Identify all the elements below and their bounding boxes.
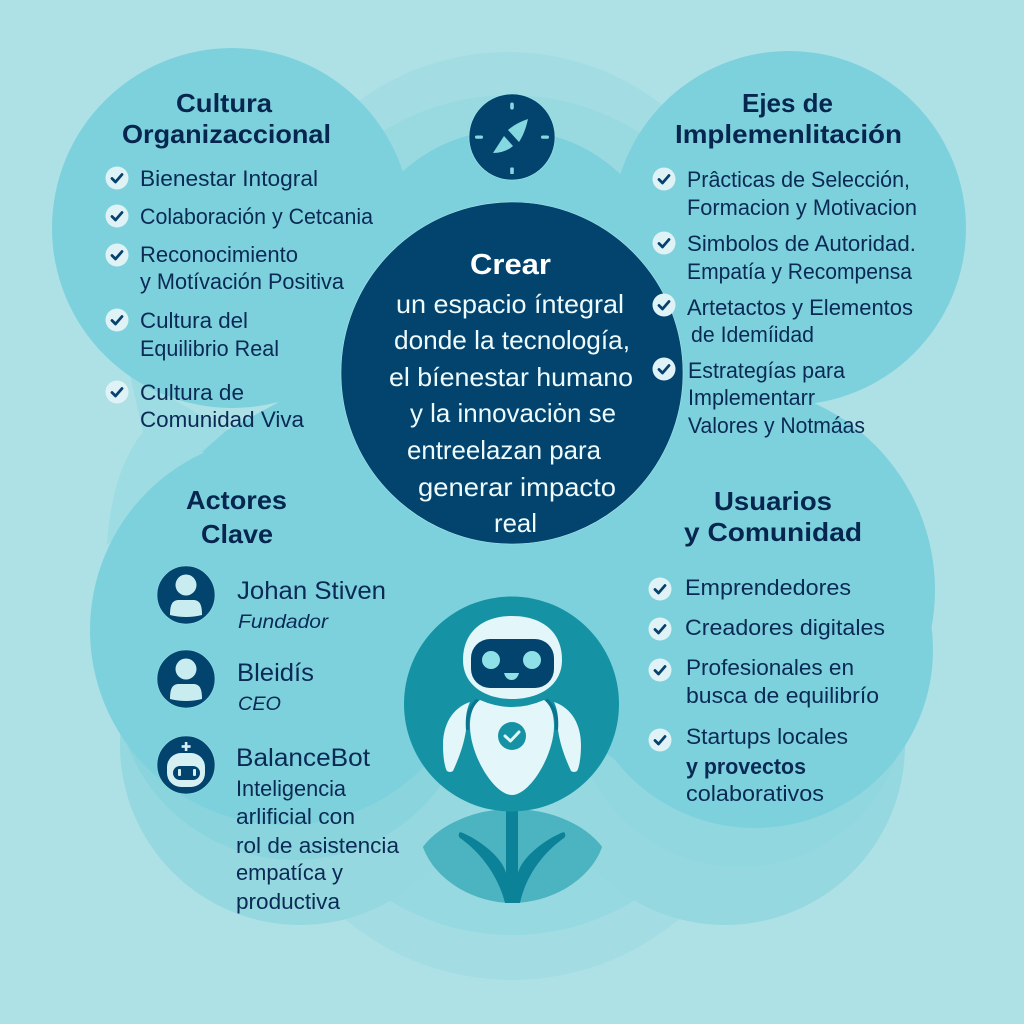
text block: central statement: generar impacto xyxy=(418,472,616,502)
panel backgrounds: four lobes xyxy=(52,48,966,828)
icon: user xyxy=(157,650,215,708)
robot head xyxy=(463,616,562,699)
heading: Ejes de Implemenlitación xyxy=(675,88,902,149)
list: usuarios items: y provectos xyxy=(686,754,806,779)
text block: central statement: donde la tecnología, xyxy=(394,325,630,355)
robot straps xyxy=(467,700,557,730)
list: cultura items: Cultura de xyxy=(140,380,244,405)
list: ejes items: Estrategías para xyxy=(688,358,846,383)
list: cultura items: Reconocimiento xyxy=(140,242,298,267)
panel: Actores Clave xyxy=(157,485,400,914)
text block: central statement: entreelazan para xyxy=(407,435,602,465)
heading: Ejes de Implemenlitación: Ejes de xyxy=(742,88,833,118)
list: cultura items: Comunidad Viva xyxy=(140,407,305,432)
list: usuarios items xyxy=(648,575,885,806)
robot chest check xyxy=(498,722,526,750)
actor: Bleidís xyxy=(157,650,314,715)
list: usuarios items: Emprendedores xyxy=(685,575,851,600)
text block: central statement: un espacio íntegral xyxy=(396,289,624,319)
heading: Usuarios y Comunidad: Usuarios xyxy=(714,486,832,516)
icon: compass xyxy=(469,94,555,180)
list: ejes items: Prâcticas de Selección, xyxy=(687,167,910,192)
list: cultura items: Bienestar Intogral xyxy=(140,166,318,191)
list: usuarios items: Profesionales en xyxy=(686,655,854,680)
list: cultura items: y Motívación Positiva xyxy=(140,269,345,294)
list: ejes items xyxy=(652,167,917,438)
heading: Actores Clave xyxy=(186,485,287,549)
actor: BalanceBot: productiva xyxy=(236,889,341,914)
panel: Cultura Organizaccional xyxy=(106,88,374,432)
text block: central statement xyxy=(389,289,633,538)
actor: BalanceBot: BalanceBot xyxy=(236,744,370,772)
heading: Cultura Organizaccional: Cultura xyxy=(176,88,273,118)
heading: Usuarios y Comunidad: y Comunidad xyxy=(684,517,862,547)
list: usuarios items: colaborativos xyxy=(686,781,824,806)
list: cultura items xyxy=(106,166,374,432)
list: ejes items: de Idemíidad xyxy=(691,322,814,347)
list: ejes items: Artetactos y Elementos xyxy=(687,295,913,320)
actor: Johan Stiven: Johan Stiven xyxy=(237,577,386,605)
actor: Johan Stiven: Fundador xyxy=(238,612,329,633)
list: cultura items: Equilibrio Real xyxy=(140,336,279,361)
actor: Bleidís: Bleidís xyxy=(237,659,314,687)
icon: bot xyxy=(157,736,215,794)
icon: user xyxy=(157,566,215,624)
text block: central statement: el bíenestar humano xyxy=(389,362,633,392)
heading: Usuarios y Comunidad xyxy=(684,486,862,547)
actor: Johan Stiven xyxy=(157,566,386,633)
text block: central statement: real xyxy=(494,508,537,538)
heading: Crear: Crear xyxy=(470,249,551,281)
list: usuarios items: busca de equilibrío xyxy=(686,683,879,708)
panel: Usuarios y Comunidad xyxy=(648,486,885,806)
icon: plant leaf base xyxy=(424,805,601,903)
background: faint overlapping rings xyxy=(107,52,907,980)
heading: Cultura Organizaccional xyxy=(122,88,331,149)
actor: BalanceBot xyxy=(157,736,400,914)
heading: Cultura Organizaccional: Organizaccional xyxy=(122,119,331,149)
illustration: robot xyxy=(404,596,619,812)
actor: BalanceBot: empatíca y xyxy=(236,860,343,885)
panel: central message circle xyxy=(341,202,683,544)
list: usuarios items: Startups locales xyxy=(686,724,848,749)
actor: BalanceBot: Inteligencia xyxy=(236,776,347,801)
list: ejes items: Valores y Notmáas xyxy=(688,413,865,438)
list: usuarios items: Creadores digitales xyxy=(685,615,885,640)
heading: Ejes de Implemenlitación: Implemenlitación xyxy=(675,119,902,149)
actor: BalanceBot: rol de asistencia xyxy=(236,833,400,858)
panel: Ejes de Implementación xyxy=(652,88,917,438)
text block: central statement: y la innovaciȯn se xyxy=(410,398,616,428)
robot arms xyxy=(443,702,470,772)
robot body xyxy=(470,700,554,795)
actor: BalanceBot: arlificial con xyxy=(236,804,355,829)
actor: Bleidís: CEO xyxy=(238,694,281,715)
list: ejes items: Empatía y Recompensa xyxy=(687,259,913,284)
heading: Actores Clave: Actores xyxy=(186,485,287,515)
list: ejes items: Simbolos de Autoridad. xyxy=(687,231,916,256)
list: cultura items: Cultura del xyxy=(140,308,248,333)
list: ejes items: Implementarr xyxy=(688,385,815,410)
heading: Actores Clave: Clave xyxy=(201,519,273,549)
list: ejes items: Formacion y Motivacion xyxy=(687,195,917,220)
list: cultura items: Colaboración y Cetcania xyxy=(140,204,374,229)
